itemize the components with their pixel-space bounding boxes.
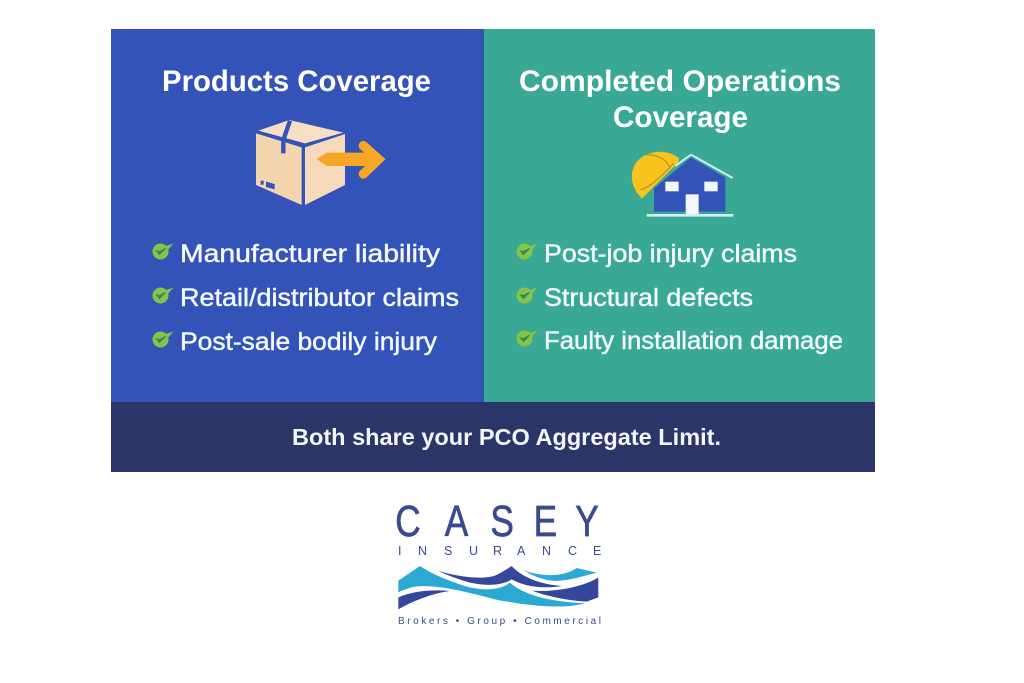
item: retail distributor claims: Retail/distributor claims <box>180 284 459 312</box>
item: structural defects: Structural defects <box>544 284 753 312</box>
checklist: products coverage <box>152 240 459 356</box>
heading: completed operations coverage: Completed Operations <box>519 65 841 98</box>
logo subtitle: INSURANCE: INSURANCE <box>398 544 601 558</box>
icon: cardboard box with arrow <box>256 120 379 205</box>
logo: Casey Insurance <box>395 497 601 627</box>
item: manufacturer liability: Manufacturer liability <box>180 240 441 268</box>
footer text: Both share your PCO Aggregate Limit. <box>292 424 721 450</box>
logo tagline: Brokers • Group • Commercial <box>398 616 601 627</box>
checklist: completed operations <box>516 240 843 355</box>
panel: completed operations coverage <box>484 29 875 402</box>
heading: completed operations coverage: Coverage <box>613 101 748 134</box>
panel: products coverage <box>111 29 484 402</box>
item: post-job injury claims: Post-job injury claims <box>544 240 797 268</box>
item: faulty installation damage: Faulty installation damage <box>544 327 843 355</box>
logo waves <box>398 566 598 609</box>
footer banner <box>111 402 875 472</box>
icon: house with hard hat <box>632 152 733 217</box>
item: post-sale bodily injury: Post-sale bodily injury <box>180 328 438 356</box>
heading: products coverage: Products Coverage <box>162 65 431 98</box>
heading: completed operations coverage <box>519 65 841 134</box>
logo wordmark: CASEY: CASEY <box>395 497 599 546</box>
